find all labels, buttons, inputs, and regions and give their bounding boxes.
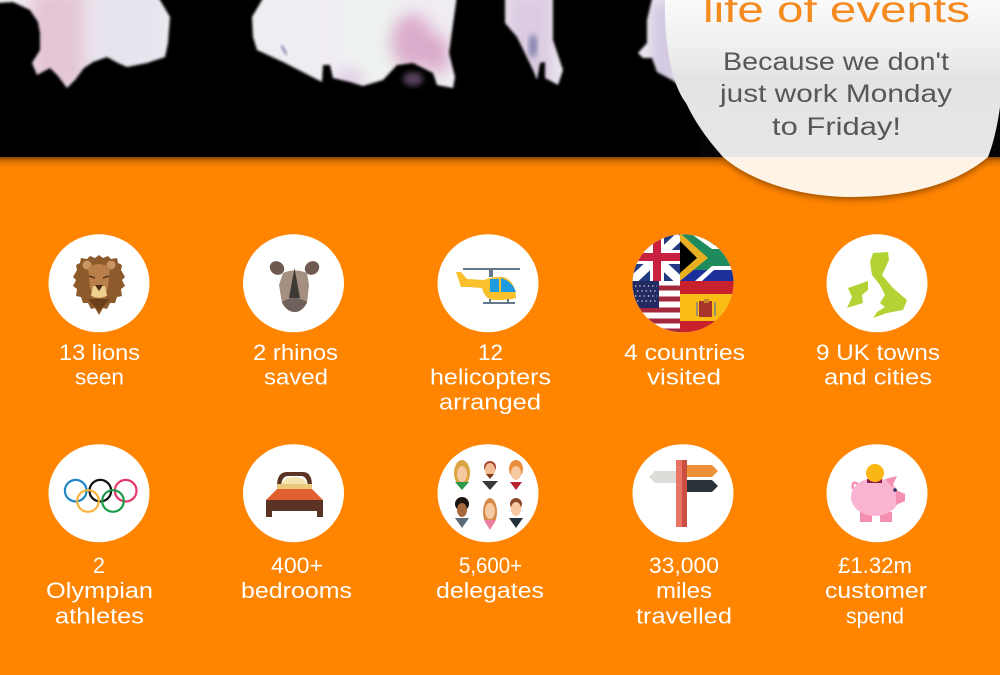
label: helicopters [430,364,551,390]
label: 4 countries [624,340,745,365]
stat: miles travelled [632,444,734,628]
icon: piggy bank [851,464,905,522]
icon: bed [266,472,323,517]
icon: four flags [632,233,734,335]
label [253,340,338,390]
label: 400+ [271,553,323,578]
icon: signpost [649,460,718,527]
USA flag [632,281,680,335]
label: £1.32m [838,553,912,578]
shadow band under photo [0,157,1000,167]
label: travelled [636,604,732,628]
label: 2 rhinos [253,340,338,365]
label: 2 [93,553,105,578]
stat: lions [48,234,150,390]
label [46,553,153,628]
label [241,553,352,603]
icon: helicopter [456,269,520,303]
callout text: just work Monday [719,80,953,108]
label: and cities [824,364,932,390]
label: spend [846,604,904,628]
South Africa flag [680,233,734,281]
label [825,553,927,628]
label: 5,600+ [459,553,522,578]
Spain flag [680,281,734,335]
UK flag [632,233,680,281]
label: miles [656,578,712,603]
label: bedrooms [241,578,352,603]
callout text: Because we don't [723,48,949,76]
stat: bedrooms [241,444,352,603]
label: 9 UK towns [816,340,940,365]
stat: rhinos [243,234,344,390]
label: Olympian [46,578,153,603]
label: 13 lions [59,340,140,365]
label: delegates [436,578,544,603]
icon: Olympic rings [65,480,136,512]
label: 12 [478,340,503,365]
icon: lion [73,255,125,315]
label: arranged [439,390,541,414]
label [624,340,745,390]
callout text: to Friday! [772,113,901,141]
label [636,553,732,628]
label: visited [647,364,721,390]
stat: Olympian athletes [46,444,153,628]
callout circle [665,0,1000,200]
label [59,340,140,390]
label [816,340,940,390]
hero photo: concert crowd [0,0,1000,165]
stat: helicopters [430,234,551,414]
label: athletes [55,604,144,628]
icon: rhino [267,258,322,312]
crowd silhouettes [0,0,685,106]
stat: customer spend [825,444,928,628]
label: saved [264,364,328,390]
label: seen [75,364,124,390]
icon: UK map [847,252,907,318]
callout text [719,48,953,141]
label [436,553,544,603]
icon: six delegates [454,460,523,530]
stat: countries [624,233,745,390]
stat: UK towns and cities [816,234,940,390]
stat: delegates [436,444,544,603]
label: customer [825,578,927,603]
label: 33,000 [649,553,719,578]
label [430,340,551,414]
